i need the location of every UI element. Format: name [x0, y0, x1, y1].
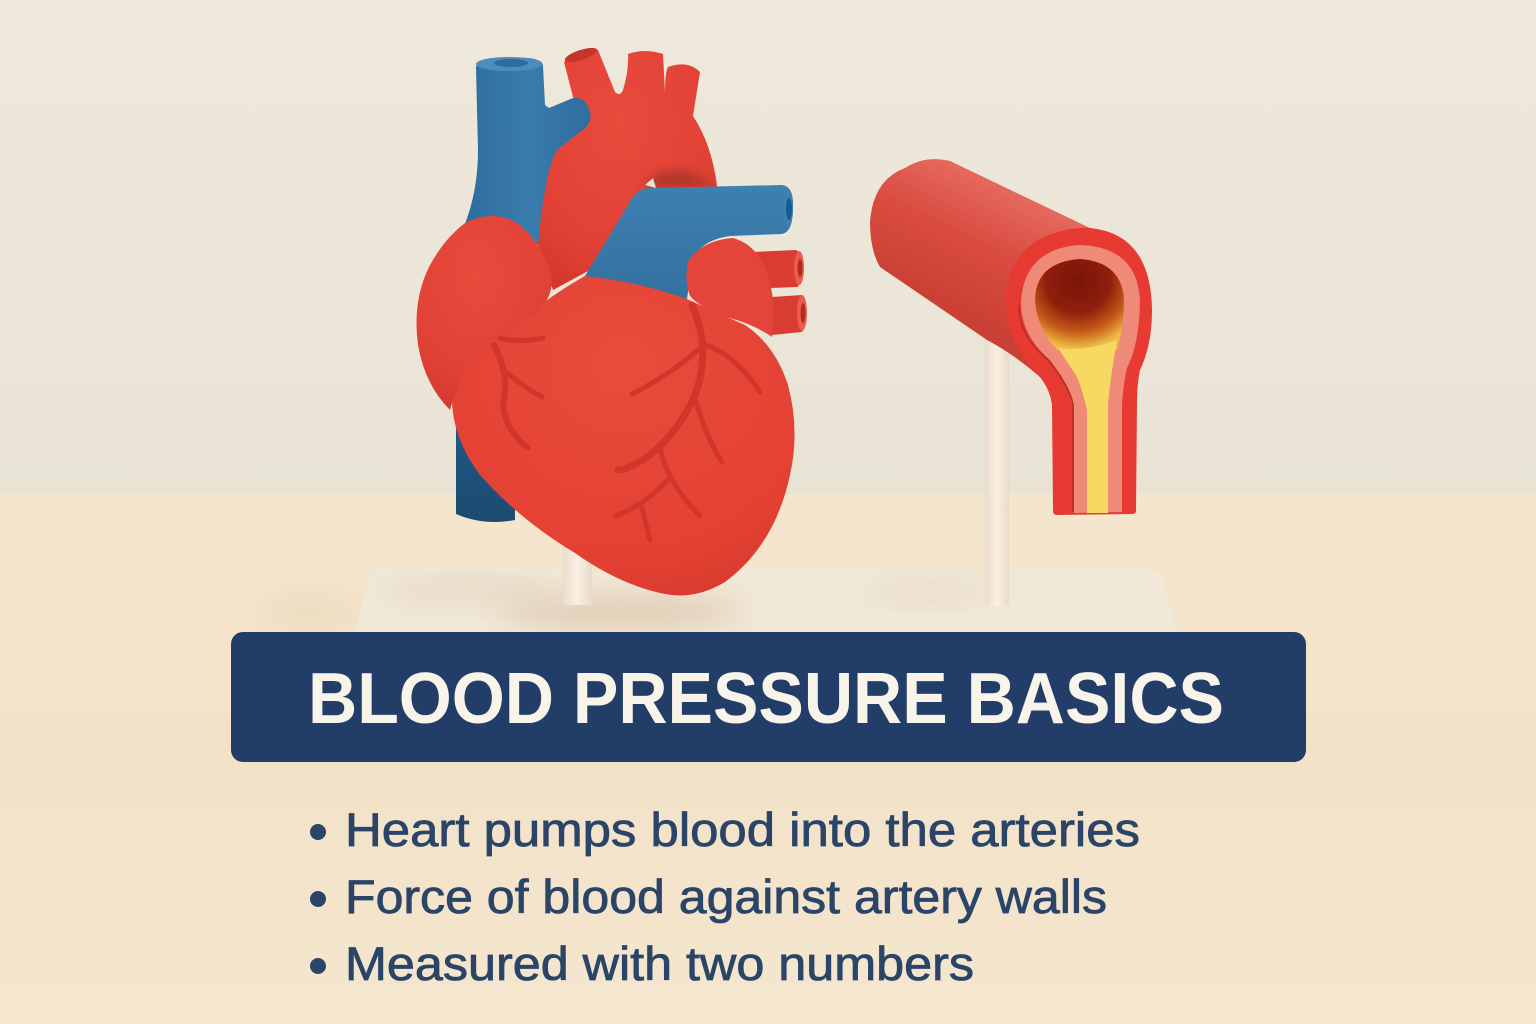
inferior vena cava [456, 410, 515, 522]
bullet 3: Measured with two numbers [345, 937, 974, 990]
wall divider [1019, 305, 1073, 512]
coronary vessels [494, 305, 760, 540]
pink middle layer [1021, 245, 1140, 513]
display base plate [260, 570, 1177, 632]
bullet 1: Heart pumps blood into the arteries [345, 803, 1140, 856]
bullet list [310, 803, 1140, 990]
background wall [0, 0, 1536, 495]
left atrial appendage [686, 238, 774, 337]
bullet 2: Force of blood against artery walls [345, 870, 1107, 923]
table surface [0, 494, 1536, 1024]
artery lumen [1035, 259, 1124, 350]
outer red wall [1006, 228, 1152, 515]
right atrium [416, 216, 552, 410]
pulmonary artery [585, 185, 793, 299]
heart main ventricle [452, 276, 795, 596]
title banner [231, 632, 1306, 762]
artery stand post [985, 335, 1009, 606]
heart stand post [563, 545, 592, 605]
heart model [416, 45, 807, 605]
artery outer tube [870, 159, 1140, 400]
right-side pulmonary vein tubes [752, 250, 807, 335]
aortic arch and branches [537, 45, 717, 290]
title: BLOOD PRESSURE BASICS [308, 659, 1224, 739]
yellow plaque core [1058, 340, 1117, 513]
artery cross-section model [870, 159, 1152, 515]
superior vena cava [465, 57, 591, 245]
